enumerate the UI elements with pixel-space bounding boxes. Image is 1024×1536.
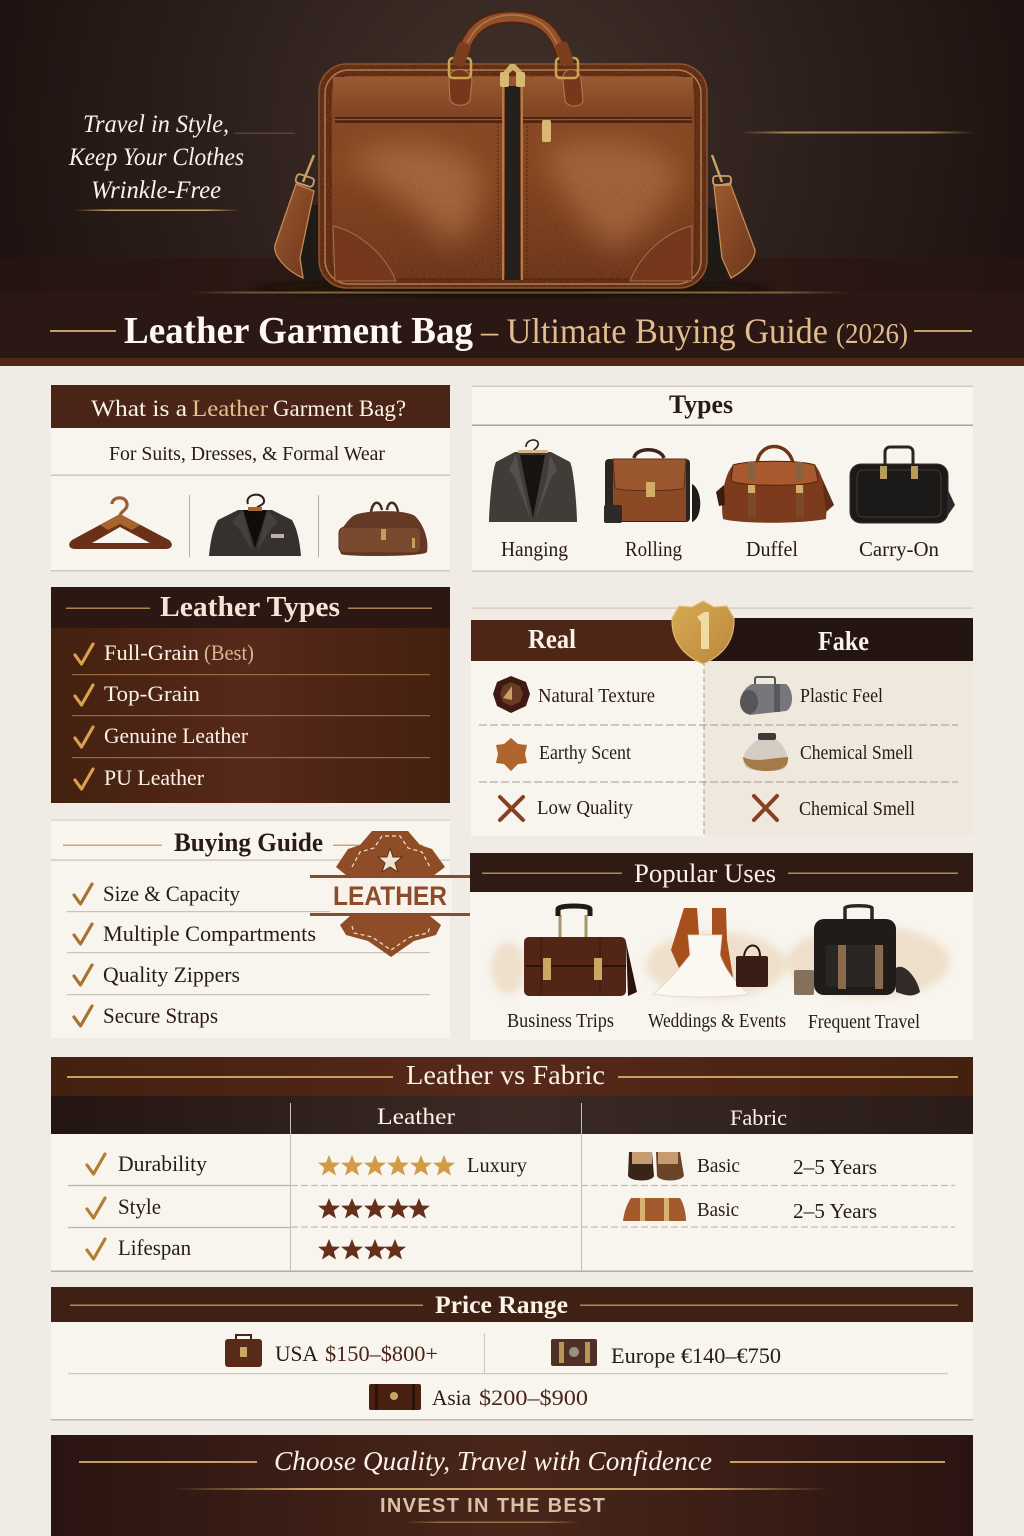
row: lifespan bbox=[87, 1235, 191, 1260]
left gusset bbox=[300, 205, 320, 280]
left strap bbox=[275, 184, 314, 278]
hero tagline bbox=[68, 111, 975, 211]
panel: what is a leather garment bag bbox=[51, 385, 450, 572]
corner patches bbox=[333, 226, 396, 281]
item: genuine leather: Genuine Leather bbox=[104, 723, 249, 748]
title: – Ultimate Buying Guide bbox=[480, 311, 828, 351]
text: plastic feel: Plastic Feel bbox=[800, 686, 884, 707]
hero tagline: Keep Your Clothes bbox=[68, 144, 244, 171]
icon: carry-on bbox=[850, 447, 955, 523]
panel: popular uses bbox=[470, 853, 973, 1040]
rating: four dark stars bbox=[318, 1239, 406, 1260]
heading: Leather Types bbox=[160, 591, 340, 623]
icon: chemical bottle bbox=[743, 733, 788, 771]
icon: black backpack bbox=[794, 906, 920, 995]
title: Leather Garment Bag bbox=[124, 310, 473, 352]
icon: usa case bbox=[225, 1335, 262, 1367]
label: hanging: Hanging bbox=[501, 537, 568, 561]
text: basic: Basic bbox=[697, 1155, 740, 1177]
heading: Popular Uses bbox=[634, 859, 776, 888]
label: carry-on: Carry-On bbox=[859, 537, 939, 561]
pocket seam bbox=[335, 117, 503, 123]
rating: six gold stars bbox=[318, 1155, 455, 1176]
text: natural texture: Natural Texture bbox=[538, 686, 655, 707]
icon: natural texture bbox=[493, 676, 530, 713]
heading: fake: Fake bbox=[818, 626, 869, 656]
rating: five dark stars bbox=[318, 1198, 430, 1218]
label: weddings and events: Weddings & Events bbox=[648, 1011, 786, 1032]
icon: business case bbox=[524, 906, 637, 996]
label: frequent travel: Frequent Travel bbox=[808, 1012, 921, 1033]
badge: leather patch bbox=[310, 831, 470, 957]
text: years: 2–5 Years bbox=[793, 1155, 877, 1179]
zippers bbox=[500, 64, 526, 78]
badge: leather patch: LEATHER bbox=[333, 881, 447, 911]
price: asia: Asia bbox=[432, 1385, 471, 1410]
bag body bbox=[319, 64, 707, 288]
heading: Buying Guide bbox=[174, 828, 323, 857]
heading: Leather bbox=[192, 396, 268, 421]
row: durability: Durability bbox=[118, 1151, 207, 1176]
title: (2026) bbox=[836, 319, 908, 350]
right gusset bbox=[704, 205, 728, 282]
icon: dress bbox=[653, 908, 768, 997]
price: usa: USA bbox=[275, 1341, 318, 1366]
item: pu leather: PU Leather bbox=[104, 765, 205, 790]
hero tagline: Wrinkle-Free bbox=[91, 177, 221, 204]
icon: earthy scent bbox=[496, 738, 527, 771]
icon: suit bbox=[209, 495, 301, 556]
subheading: For Suits, Dresses, & Formal Wear bbox=[109, 444, 386, 465]
text: luxury: Luxury bbox=[467, 1153, 527, 1177]
text: earthy scent: Earthy Scent bbox=[539, 743, 632, 764]
beige wash bbox=[491, 926, 950, 998]
centre stripe bbox=[502, 84, 504, 280]
text: low quality: Low Quality bbox=[537, 797, 633, 819]
label: duffel: Duffel bbox=[746, 537, 798, 561]
handle tabs bbox=[449, 70, 472, 105]
panel: real vs fake bbox=[471, 601, 973, 836]
icon: x mark bbox=[500, 797, 523, 820]
item: full-grain bbox=[75, 640, 254, 665]
price: europe: Europe €140–€750 bbox=[611, 1343, 781, 1368]
column heading: leather: Leather bbox=[377, 1104, 455, 1129]
label: rolling: Rolling bbox=[625, 537, 682, 561]
row: lifespan: Lifespan bbox=[118, 1235, 191, 1260]
icon: fabric shoes bbox=[628, 1152, 684, 1180]
icon: hanging jacket bbox=[489, 440, 577, 522]
item: quality zippers: Quality Zippers bbox=[103, 962, 240, 987]
icon: gold shield badge bbox=[672, 601, 734, 664]
right strap bbox=[714, 183, 755, 278]
hero leather bag bbox=[252, 15, 772, 295]
price: usa: $150–$800+ bbox=[325, 1341, 438, 1366]
icon: x mark bbox=[754, 796, 777, 820]
panel: buying guide bbox=[51, 820, 450, 1038]
item: size and capacity: Size & Capacity bbox=[103, 881, 240, 906]
footer banner bbox=[51, 1435, 973, 1536]
panel: leather types bbox=[51, 587, 450, 803]
title bbox=[50, 310, 972, 352]
row: style: Style bbox=[118, 1194, 161, 1219]
price: asia bbox=[432, 1385, 588, 1410]
text: years: 2–5 Years bbox=[793, 1199, 877, 1223]
closing line: Choose Quality, Travel with Confidence bbox=[274, 1446, 712, 1476]
icon: europe case bbox=[551, 1339, 597, 1366]
call to action: INVEST IN THE BEST bbox=[380, 1495, 605, 1517]
item: full-grain: (Best) bbox=[204, 640, 254, 665]
icon: duffel bbox=[716, 446, 834, 523]
panel: leather vs fabric bbox=[51, 1057, 973, 1272]
item: secure straps: Secure Straps bbox=[103, 1003, 218, 1028]
highlight swaths bbox=[345, 144, 481, 245]
icon: asia case bbox=[369, 1384, 421, 1410]
heading: Types bbox=[669, 390, 733, 419]
text: chemical smell: Chemical Smell bbox=[800, 743, 914, 764]
hero banner bbox=[0, 0, 1024, 366]
price: asia: $200–$900 bbox=[479, 1385, 588, 1410]
heading: Garment Bag? bbox=[273, 396, 406, 421]
heading: real: Real bbox=[528, 624, 576, 654]
item: top-grain: Top-Grain bbox=[104, 681, 200, 706]
panel: types bbox=[472, 386, 973, 572]
hero tagline: Travel in Style, bbox=[83, 111, 229, 138]
icon: small bag bbox=[339, 503, 427, 556]
heading bbox=[91, 396, 406, 421]
icon: fabric bag bbox=[623, 1198, 686, 1221]
icon: rolling bag bbox=[604, 450, 700, 523]
label: business trips: Business Trips bbox=[507, 1011, 614, 1032]
column heading: fabric: Fabric bbox=[730, 1105, 787, 1130]
text: chemical smell: Chemical Smell bbox=[799, 799, 916, 820]
price: usa bbox=[275, 1341, 438, 1366]
handle bbox=[459, 17, 567, 66]
heading: Price Range bbox=[435, 1292, 568, 1319]
heading: What is a bbox=[91, 396, 187, 421]
item: multiple compartments: Multiple Compartments bbox=[103, 921, 316, 946]
row: style bbox=[87, 1194, 161, 1219]
heading: Leather vs Fabric bbox=[406, 1060, 605, 1090]
text: basic: Basic bbox=[697, 1199, 739, 1221]
icon: hanger bbox=[69, 498, 172, 549]
panel: price range bbox=[51, 1287, 973, 1420]
item: full-grain: Full-Grain bbox=[104, 640, 199, 665]
icon: plastic bag bbox=[740, 677, 792, 715]
